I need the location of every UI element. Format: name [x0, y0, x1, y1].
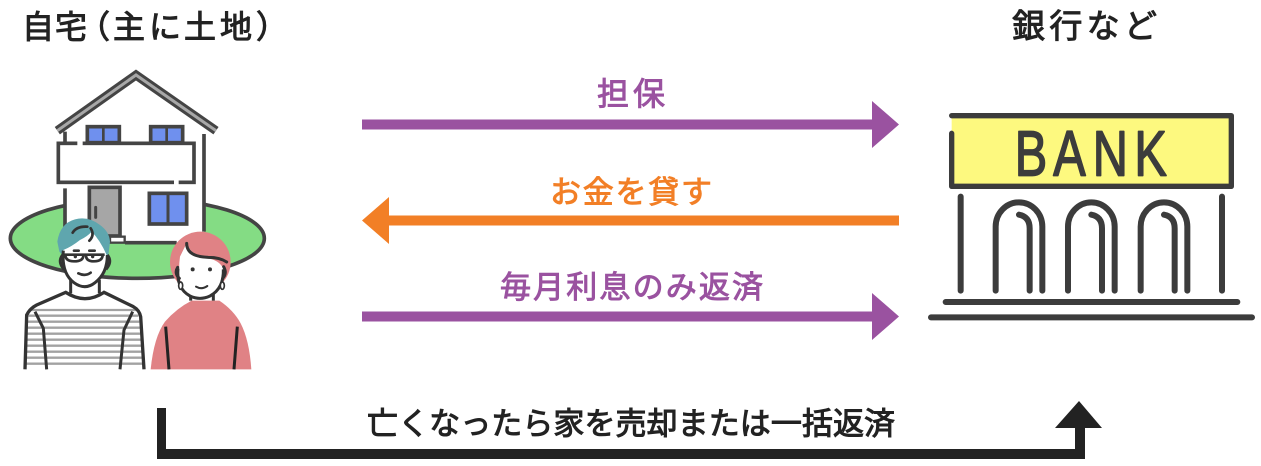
- label: monthly interest only repayment: 毎月利息のみ返済: [500, 270, 763, 305]
- signboard: [952, 116, 1231, 190]
- woman: [151, 232, 251, 369]
- house: [57, 75, 216, 243]
- arrow: money to home: [362, 197, 899, 244]
- columns and arches: [931, 197, 1252, 317]
- signboard: BANK: [1015, 119, 1167, 190]
- heading: home (mainly land): 自宅（主に土地）: [22, 9, 288, 45]
- label: sell or repay on death: 亡くなったら家を売却または一括返済: [367, 406, 895, 442]
- arrow: collateral to bank: [362, 101, 899, 148]
- arrow: interest to bank: [362, 293, 899, 340]
- heading: bank etc: 銀行など: [1012, 8, 1157, 44]
- label: lend money: お金を貸す: [550, 175, 712, 210]
- label: collateral: 担保: [597, 76, 665, 112]
- green lawn: [10, 198, 264, 278]
- illustration: bank: [931, 116, 1252, 317]
- arrow: settlement to bank: [157, 401, 1102, 459]
- man: [25, 218, 144, 369]
- illustration: house and couple: [10, 75, 264, 369]
